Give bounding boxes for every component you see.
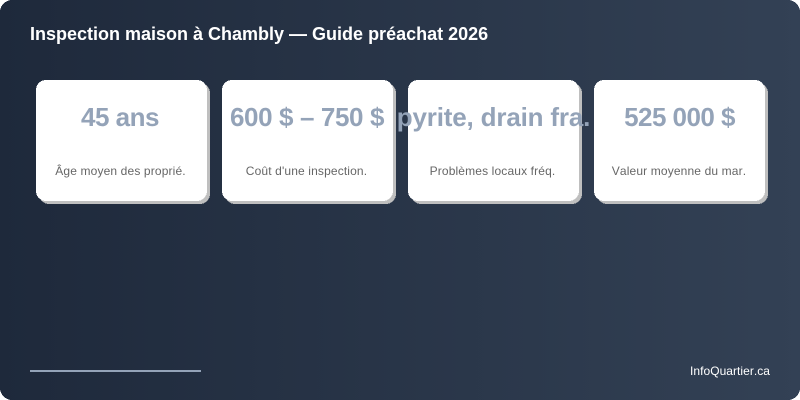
panel: age card — [36, 80, 210, 204]
footer rule — [30, 370, 201, 372]
value: problems: pyrite, drain fra. — [397, 102, 590, 132]
value: age: 45 ans — [81, 102, 159, 132]
label: problems: Problèmes locaux fréq. — [430, 164, 555, 178]
title: Inspection maison à Chambly — Guide préachat 2026 — [30, 24, 488, 44]
panel: cost card — [222, 80, 396, 204]
panel: market value card — [594, 80, 768, 204]
value: cost: 600 $ – 750 $ — [230, 102, 384, 132]
card shape — [36, 80, 210, 204]
panel: local problems card — [397, 80, 590, 204]
card shape — [594, 80, 768, 204]
label: market: Valeur moyenne du mar. — [612, 164, 746, 178]
card shape — [408, 80, 582, 204]
label: age: Âge moyen des proprié. — [55, 164, 186, 178]
label: cost: Coût d'une inspection. — [246, 164, 367, 178]
value: market: 525 000 $ — [624, 102, 735, 132]
card shape — [222, 80, 396, 204]
source: InfoQuartier.ca: InfoQuartier.ca — [690, 364, 770, 378]
